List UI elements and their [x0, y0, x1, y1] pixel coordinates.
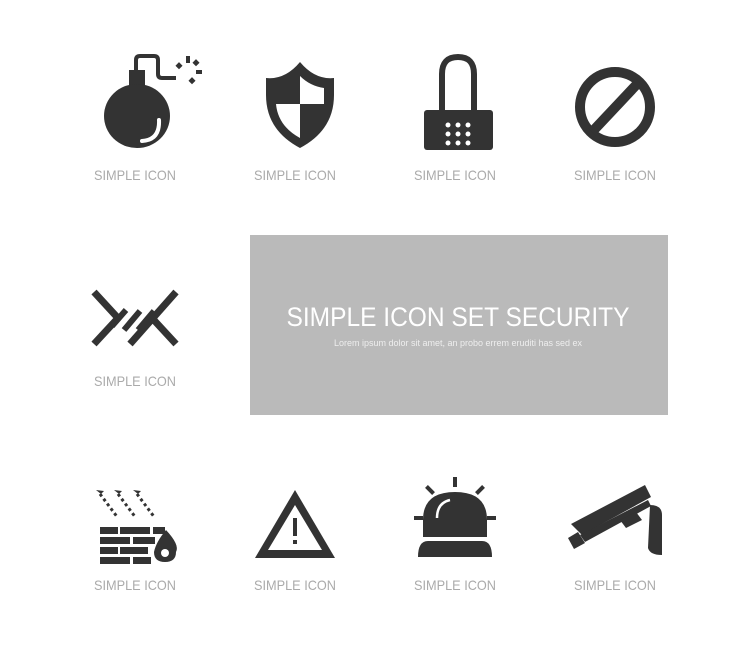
- icon: siren: [414, 477, 496, 557]
- icon: warning triangle: [255, 490, 335, 558]
- icon: firewall: [96, 490, 177, 564]
- title panel: [250, 235, 668, 415]
- labels: SIMPLE ICON: [94, 167, 176, 183]
- labels: [94, 167, 656, 593]
- title panel: SIMPLE ICON SET SECURITY: [286, 302, 630, 332]
- labels: SIMPLE ICON: [94, 577, 176, 593]
- labels: SIMPLE ICON: [254, 167, 336, 183]
- title panel: Lorem ipsum dolor sit amet, an probo errem eruditi has sed ex: [334, 338, 582, 348]
- icon: security camera: [568, 485, 662, 555]
- labels: SIMPLE ICON: [414, 167, 496, 183]
- icon: bomb: [104, 56, 202, 148]
- labels: SIMPLE ICON: [94, 373, 176, 389]
- icon: barbed wire: [94, 292, 176, 344]
- icon: prohibited sign: [580, 72, 650, 142]
- labels: SIMPLE ICON: [414, 577, 496, 593]
- labels: SIMPLE ICON: [574, 167, 656, 183]
- labels: SIMPLE ICON: [574, 577, 656, 593]
- icon: shield: [266, 62, 334, 148]
- labels: SIMPLE ICON: [254, 577, 336, 593]
- icon: padlock: [424, 57, 493, 150]
